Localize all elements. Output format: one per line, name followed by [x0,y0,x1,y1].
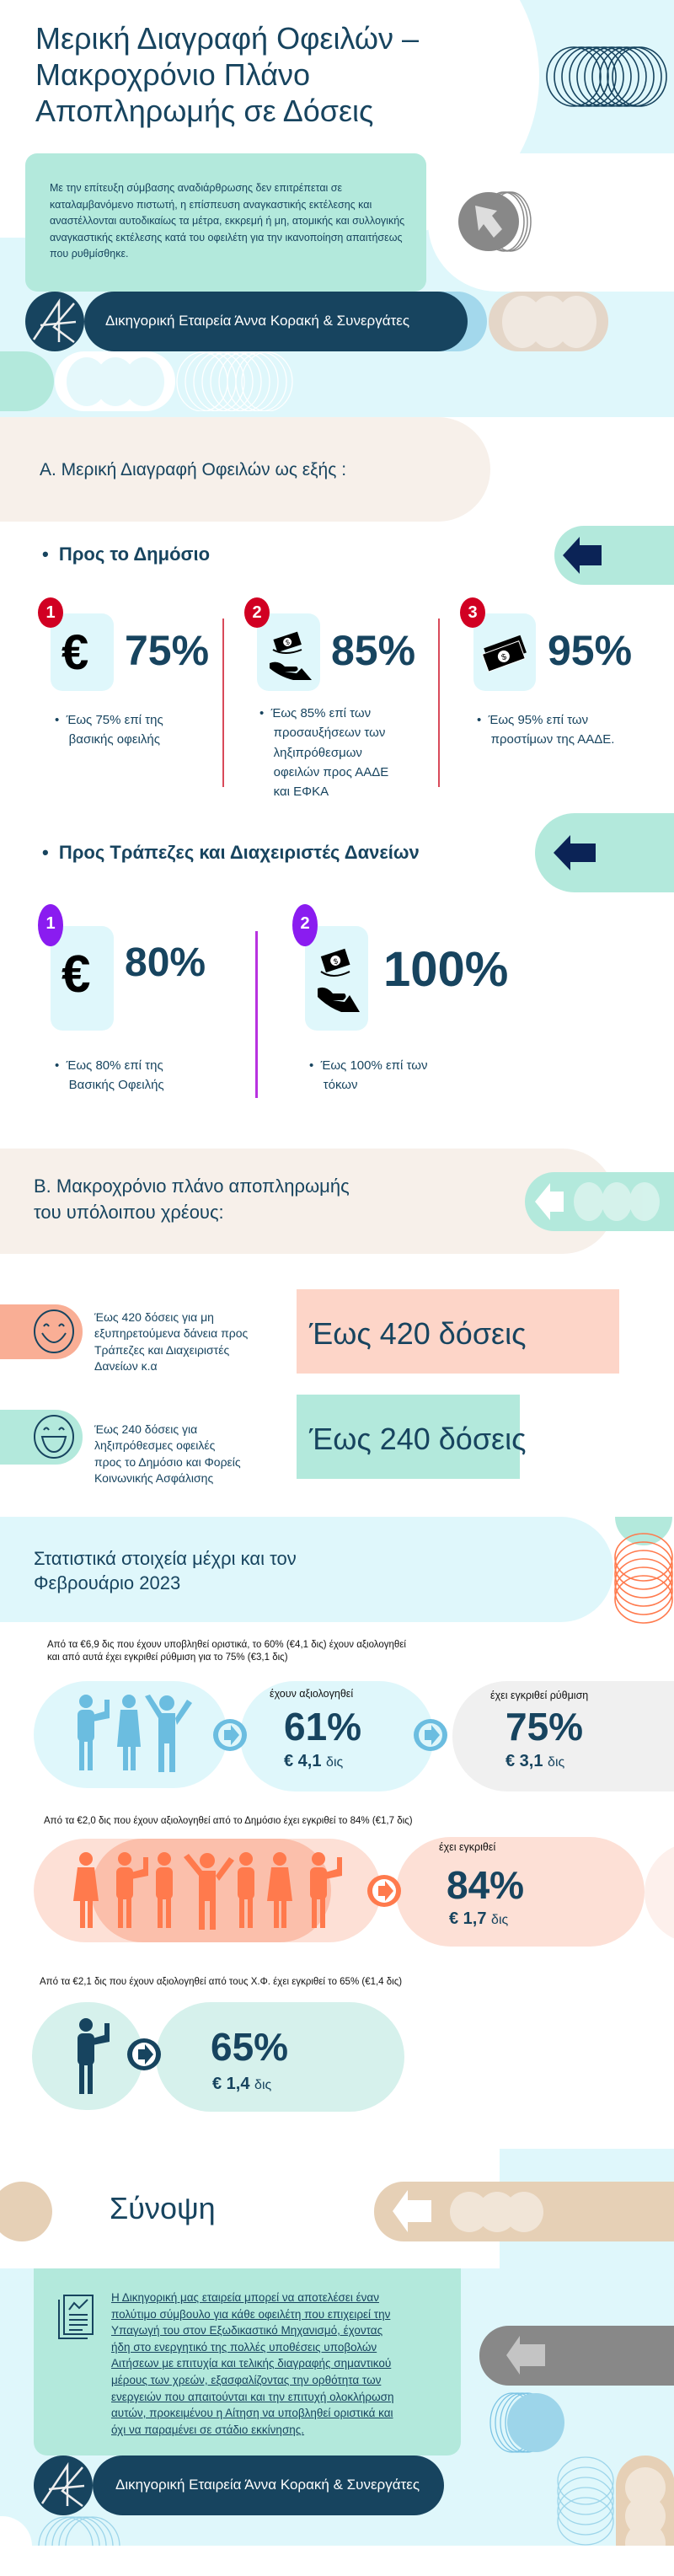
stats row 3: € 1,4 δις [212,2075,271,2093]
banner: firm: Δικηγορική Εταιρεία Άννα Κορακή & Συνεργάτες [105,313,409,329]
stats row 1: € 3,1 δις [506,1752,564,1770]
section B heading pill [0,1149,615,1254]
stats row 1: έχουν αξιολογηθεί [270,1688,353,1700]
item public 2: 85% [331,627,415,674]
beige arrow pill [374,2182,674,2241]
item public 3: 3 [468,603,478,622]
arrow circle orange [367,1875,401,1907]
arrow pill 1 [554,526,674,585]
item bank 1 [38,904,206,1092]
arrow circle dark [127,2038,161,2070]
plan 420: Έως 420 δόσεις για μη [94,1310,214,1324]
summary box: ήδη στο ενεργητικό της πολλές υποθέσεις υποβολών [111,2341,377,2354]
arrow circle [213,1719,247,1751]
stats title: Φεβρουάριο 2023 [34,1572,180,1593]
item public 1: € [62,625,88,680]
stats row 1: € 4,1 δις [284,1752,343,1770]
item public 3 [460,597,632,747]
stats text 1 [47,1640,406,1662]
item public 2: • Έως 85% επί των [259,706,371,720]
plan 420: Τράπεζες και Διαχειριστές [94,1343,229,1357]
plan 420 [0,1289,619,1374]
bottom cyan bg [500,2149,674,2268]
item bank 1: • Έως 80% επί της [55,1058,163,1073]
stats title [34,1548,297,1593]
arrow pill B [525,1172,674,1231]
stats text 3: Από τα €2,1 δις που έχουν αξιολογηθεί από τους Χ.Φ. έχει εγκριθεί το 65% (€1,4 δις) [40,1977,402,1987]
stats row 2: έχει εγκριθεί [439,1841,495,1853]
divider red 1 [222,619,224,787]
plan 240: Έως 240 δόσεις [309,1422,526,1456]
item public 2 [244,597,415,799]
heading: public: • Προς το Δημόσιο [42,544,210,565]
icon: dark person [78,2018,110,2094]
item public 2: και ΕΦΚΑ [274,785,329,799]
section A heading pill [0,417,490,522]
icon: orange people [73,1852,342,1930]
item bank 2: $ [333,956,339,966]
item bank 1: Βασικής Οφειλής [69,1078,164,1092]
stats text 1: Από τα €6,9 δις που έχουν υποβληθεί οριστικά, το 60% (€4,1 δις) έχουν αξιολογηθεί [47,1640,406,1650]
item public 1: βασικής οφειλής [69,732,160,747]
icon: laughing face [0,1410,83,1465]
icon: smiley [0,1304,83,1359]
stats row 2: 84% [447,1863,524,1907]
item bank 1: 80% [125,940,206,985]
icon: blue coin [489,2392,564,2453]
item public 3: προστίμων της ΑΑΔΕ. [491,732,614,747]
section B title: Β. Μακροχρόνιο πλάνο αποπληρωμής [34,1176,350,1197]
section A title: Α. Μερική Διαγραφή Οφειλών ως εξής : [40,460,346,479]
summary box: μέρους των χρεών, εξασφαλίζοντας την ορθότητα των [111,2374,381,2386]
beige circles pill [489,292,608,351]
item public 1 [38,597,209,747]
summary box: Αιτήσεων με επιτυχία και τελικής διαγραφής σημαντικού [111,2357,391,2370]
gray arrow pill [479,2326,674,2386]
title [35,21,419,128]
title: Μακροχρόνιο Πλάνο [35,57,310,92]
plan 240: Έως 240 δόσεις για [94,1422,197,1436]
item bank 2: 2 [300,914,310,933]
summary box: Υπαγωγή του στον Εξωδικαστικό Μηχανισμό, έχοντας [111,2324,382,2337]
item public 2: ληξιπρόθεσμων [274,746,362,760]
section B title: του υπόλοιπου χρέους: [34,1202,224,1223]
item bank 1: 1 [45,914,56,933]
stats text 1: και από αυτά έχει εγκριθεί ρύθμιση για το 75% (€3,1 δις) [47,1652,288,1662]
item public 1: • Έως 75% επί της [55,713,163,727]
stats text 2: Από τα €2,0 δις που έχουν αξιολογηθεί από το Δημόσιο έχει εγκριθεί το 84% (€1,7 δις) [44,1816,413,1826]
item public 2: προσαυξήσεων των [274,726,385,740]
stats row 1: έχει εγκριθεί ρύθμιση [490,1690,588,1701]
icon: orange spring [614,1517,673,1624]
summary title: Σύνοψη [110,2191,216,2225]
divider purple [255,931,258,1098]
stats row 1: 61% [284,1705,361,1749]
banner: firm [25,292,487,351]
item public 3: • Έως 95% επί των [477,713,588,727]
item bank 2: τόκων [324,1078,357,1092]
stats row 3: 65% [211,2025,288,2069]
icon: gray coin arrow [458,191,532,252]
item bank 1: € [62,945,90,1004]
item public 3: $ [500,652,508,662]
plan 420: Έως 420 δόσεις [309,1316,526,1351]
plan 240: προς το Δημόσιο και Φορείς [94,1455,241,1469]
beige ellipse [0,2182,52,2241]
logo [34,2456,93,2515]
summary box: πολύτιμο σύμβουλο για κάθε οφειλέτη που επιχειρεί την [111,2308,390,2321]
banner: firm bottom [34,2456,444,2515]
summary box: αυτών, προκειμένου η Αίτηση να υποβληθεί οριστικά και [111,2407,393,2419]
white pill right [428,153,674,292]
plan 240: ληξιπρόθεσμες οφειλές [94,1438,215,1452]
summary box: Η Δικηγορική μας εταιρεία μπορεί να αποτελέσει έναν [111,2291,379,2304]
arrow circle [414,1719,447,1751]
intro box [25,153,426,292]
title: Αποπληρωμής σε Δόσεις [35,94,373,128]
item public 1: 1 [45,603,56,622]
title: Μερική Διαγραφή Οφειλών – [35,21,419,56]
plan 420: εξυπηρετούμενα δάνεια προς [94,1326,248,1340]
stats title: Στατιστικά στοιχεία μέχρι και τον [34,1548,297,1569]
item bank 2: • Έως 100% επί των [309,1058,427,1073]
stats row 2: € 1,7 δις [449,1909,508,1928]
decorative row [0,351,54,411]
logo [25,292,84,351]
stats row 3 [32,2002,404,2112]
item public 2: οφειλών προς ΑΑΔΕ [274,765,388,779]
plan 240: Κοινωνικής Ασφάλισης [94,1471,213,1485]
plan 420: Δανείων κ.α [94,1359,158,1373]
plan 240 [0,1395,526,1485]
bottom decorations [0,2516,32,2576]
intro box: Με την επίτευξη σύμβασης αναδιάρθρωσης δεν επιτρέπεται σε καταλαμβανόμενο πιστωτή, η επίσπευση αναγκαστικής εκτέλεσης και αναστέλλονται αυτοδικαίως τα μέτρα, εκκρεμή ή μη, ατομικής και συλλογικής αναγκαστικής εκτέλεσης κατά του οφειλέτη για την ικανοποίηση απαιτήσεως που ρυθμίσθηκε. [50,182,404,260]
item bank 2 [292,904,508,1092]
stats row 1 [34,1681,674,1791]
heading: banks: • Προς Τράπεζες και Διαχειριστές Δανείων [42,842,420,863]
item public 3: 95% [548,627,632,674]
item bank 2: 100% [383,942,508,997]
stats row 1: 75% [506,1705,583,1749]
item public 2: $ [285,638,291,646]
icon: spring dark [546,46,667,107]
banner: firm bottom: Δικηγορική Εταιρεία Άννα Κορακή & Συνεργάτες [115,2477,420,2493]
stats heading pill [0,1517,613,1622]
summary box: όχι να παραμένει σε στάδιο εκκίνησης. [111,2423,304,2436]
stats row 2 [34,1837,674,1947]
divider red 2 [438,619,440,787]
icon: blue people [78,1695,192,1772]
background top cyan [0,0,674,417]
title pill [0,0,539,238]
arrow pill 2 [535,813,674,892]
item public 2: 2 [252,603,262,622]
section B title [34,1176,350,1223]
summary box: ενεργειών που απαιτούνται και την επιτυχή ολοκλήρωση [111,2391,394,2403]
summary box [34,2268,461,2456]
item public 1: 75% [125,627,209,674]
icon: report [58,2295,94,2339]
